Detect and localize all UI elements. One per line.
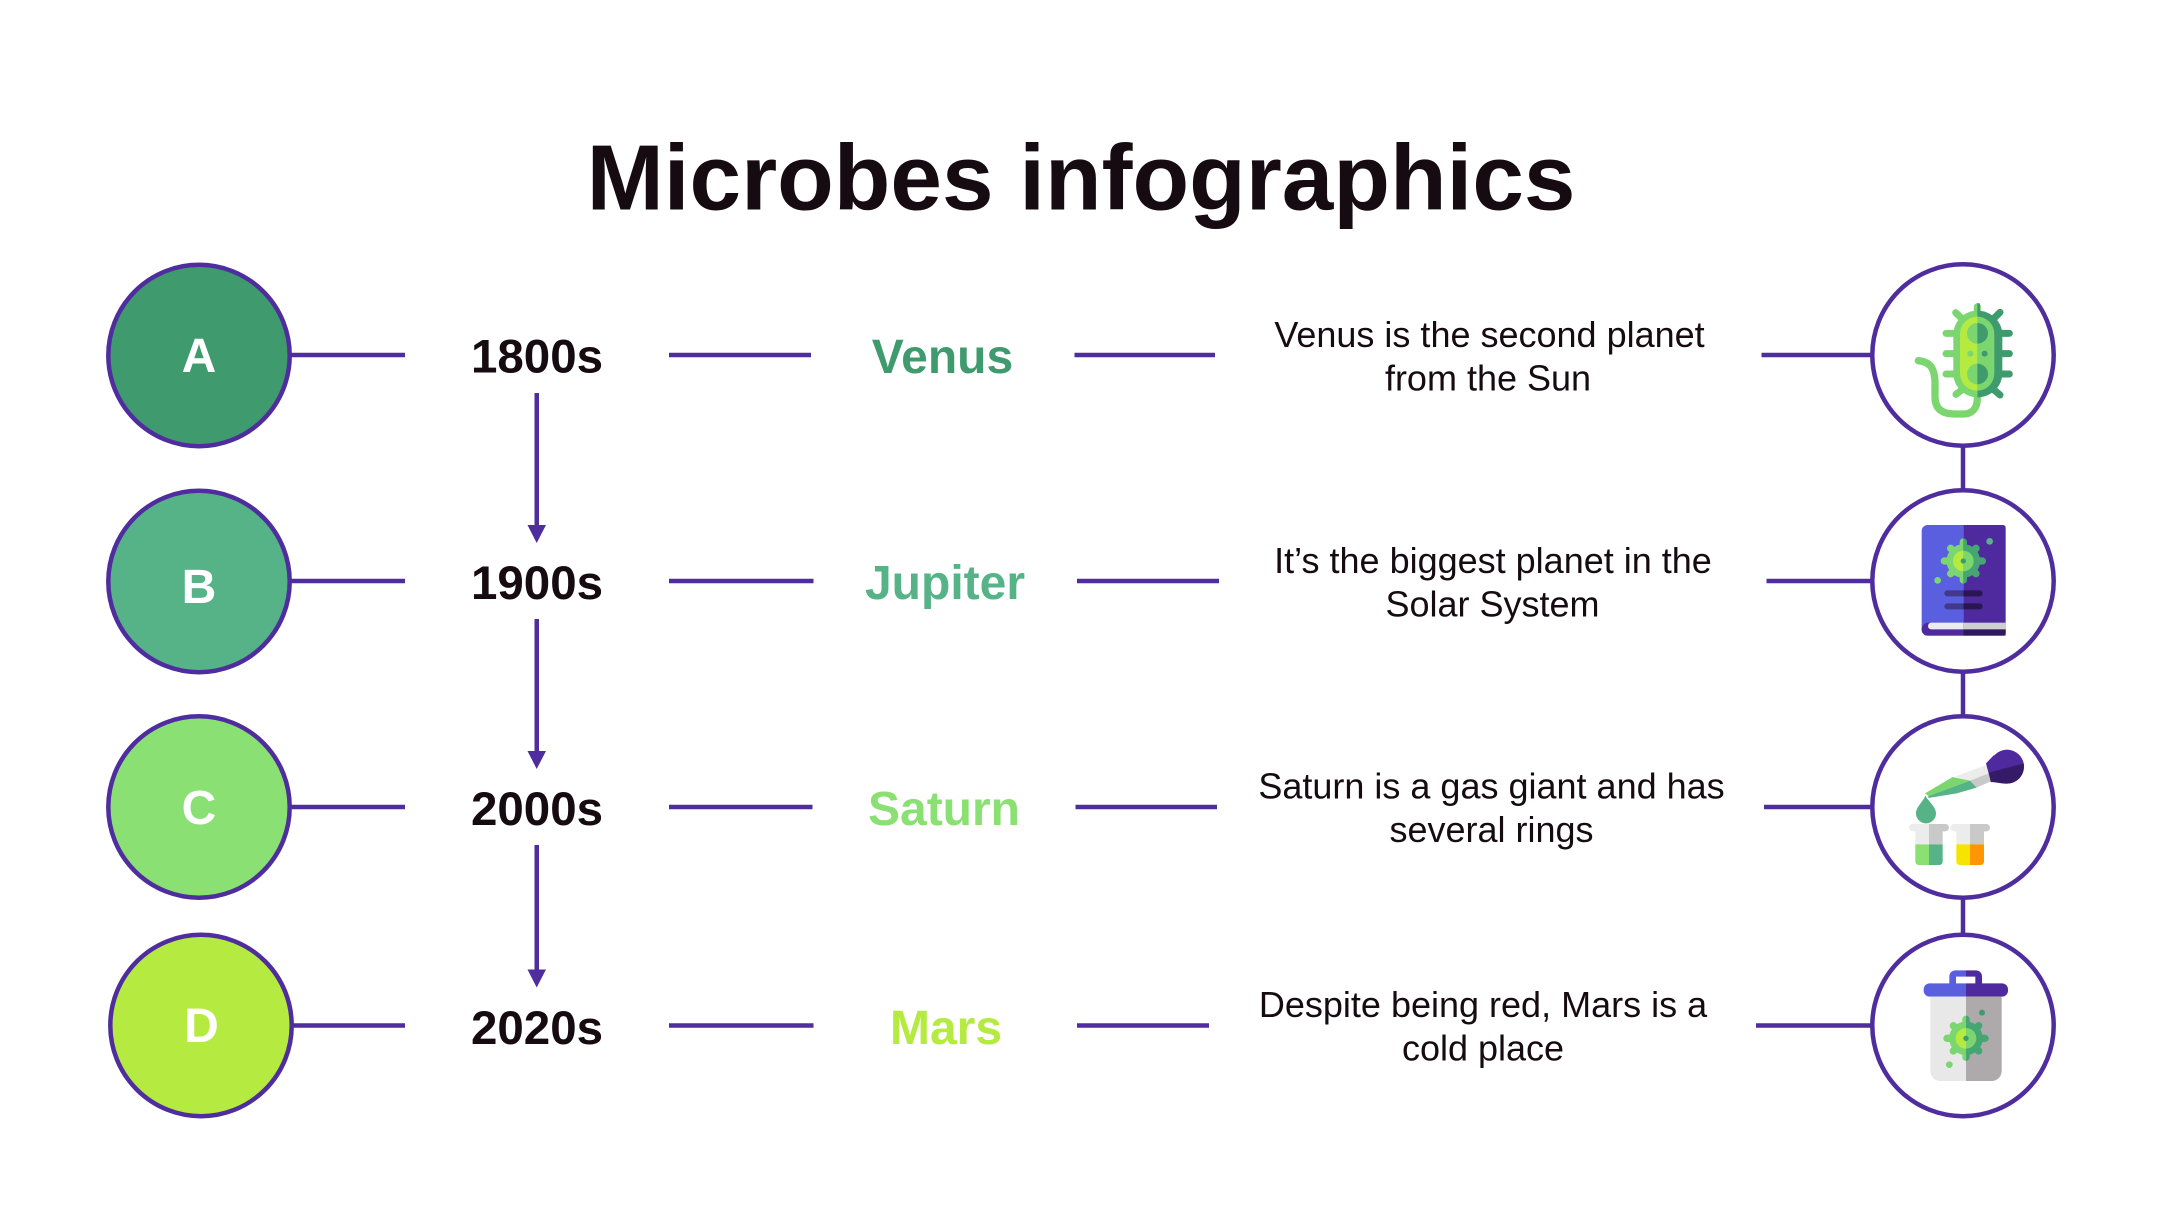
icon: microbe trash bin	[1924, 970, 2008, 1081]
icon: bacterium	[1918, 303, 2009, 414]
badge B	[108, 491, 290, 672]
row D connector lines	[290, 1023, 1872, 1028]
description Mars: Despite being red, Mars is a	[1259, 984, 1708, 1025]
badge C: C	[182, 782, 216, 835]
icon: microbe book	[1922, 525, 2006, 636]
row C: 2000s Saturn	[108, 716, 2054, 898]
arrow: 1800s to 1900s	[528, 393, 546, 543]
planet name Venus: Venus	[872, 331, 1013, 384]
description Saturn: several rings	[1389, 809, 1594, 850]
description Venus: from the Sun	[1385, 358, 1591, 398]
description Saturn	[1258, 766, 1725, 850]
planet name Saturn: Saturn	[868, 783, 1020, 836]
icon circle: trash bin	[1872, 935, 2054, 1116]
arrow: 1900s to 2000s	[528, 619, 546, 769]
description Jupiter: Solar System	[1385, 584, 1600, 624]
description Venus: Venus is the second planet	[1274, 314, 1705, 355]
title: Microbes infographics	[587, 126, 1575, 230]
badge A: A	[182, 330, 216, 383]
description Venus	[1274, 314, 1705, 398]
planet name Jupiter: Jupiter	[865, 557, 1025, 610]
row D: 2020s Mars	[110, 935, 2054, 1116]
badge D: D	[184, 1000, 219, 1053]
year 2000s: 2000s	[471, 783, 603, 836]
badge C	[108, 716, 290, 898]
connector lines between icon circles	[1961, 446, 1965, 935]
year 1800s: 1800s	[471, 330, 603, 384]
row C connector lines	[290, 805, 1872, 809]
icon circle: bacterium	[1872, 264, 2054, 446]
description Jupiter	[1274, 540, 1712, 624]
description Mars: cold place	[1402, 1028, 1564, 1068]
badge B: B	[182, 561, 216, 614]
description Jupiter: It’s the biggest planet in the	[1274, 540, 1712, 581]
planet name Mars: Mars	[890, 1002, 1002, 1055]
description Saturn: Saturn is a gas giant and has	[1258, 766, 1725, 806]
row A connector lines	[290, 353, 1872, 357]
year 2020s: 2020s	[471, 1002, 603, 1055]
row B connector lines	[290, 579, 1872, 583]
icon: dropper and beakers	[1909, 750, 2024, 865]
icon circle: book	[1872, 490, 2054, 672]
badge D	[110, 935, 292, 1116]
row A: 1800s Venus	[108, 264, 2054, 446]
arrow: 2000s to 2020s	[528, 845, 546, 988]
row B: 1900s Jupiter	[108, 490, 2054, 672]
icon circle: dropper	[1872, 716, 2054, 898]
badge A	[108, 265, 290, 446]
year 1900s: 1900s	[471, 557, 603, 610]
description Mars	[1259, 984, 1708, 1068]
